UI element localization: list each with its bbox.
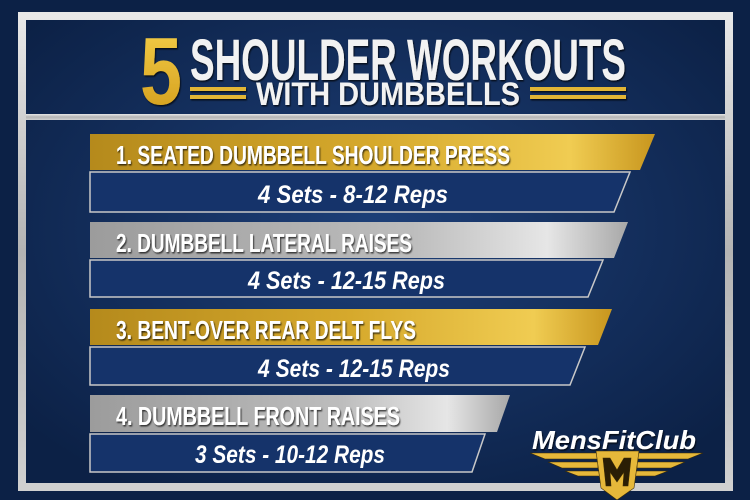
workout 4: [90, 395, 510, 472]
gold double lines: [190, 87, 626, 99]
workout 3: 4 Sets - 12-15 Reps: [257, 355, 450, 383]
logo: MensFitClub: MensFitClub: [532, 425, 696, 455]
logo: MensFitClub: [530, 425, 703, 500]
workout 3: 3. BENT-OVER REAR DELT FLYS: [116, 315, 416, 345]
workout 4: 3 Sets - 10-12 Reps: [195, 441, 385, 469]
workout 2: 2. DUMBBELL LATERAL RAISES: [116, 228, 412, 258]
workout 2: [90, 222, 628, 297]
title: [140, 18, 626, 125]
workout 1: 4 Sets - 8-12 Reps: [257, 181, 448, 209]
workout 4: 4. DUMBBELL FRONT RAISES: [116, 401, 400, 431]
title line 2: WITH DUMBBELLS: [256, 76, 520, 112]
workout 3: [90, 309, 612, 385]
workout 2: 4 Sets - 12-15 Reps: [247, 267, 445, 295]
icon: winged M emblem: [530, 451, 703, 500]
workout 1: [90, 134, 655, 212]
workout 1: 1. SEATED DUMBBELL SHOULDER PRESS: [116, 140, 510, 170]
title number 5: 5: [140, 18, 182, 125]
